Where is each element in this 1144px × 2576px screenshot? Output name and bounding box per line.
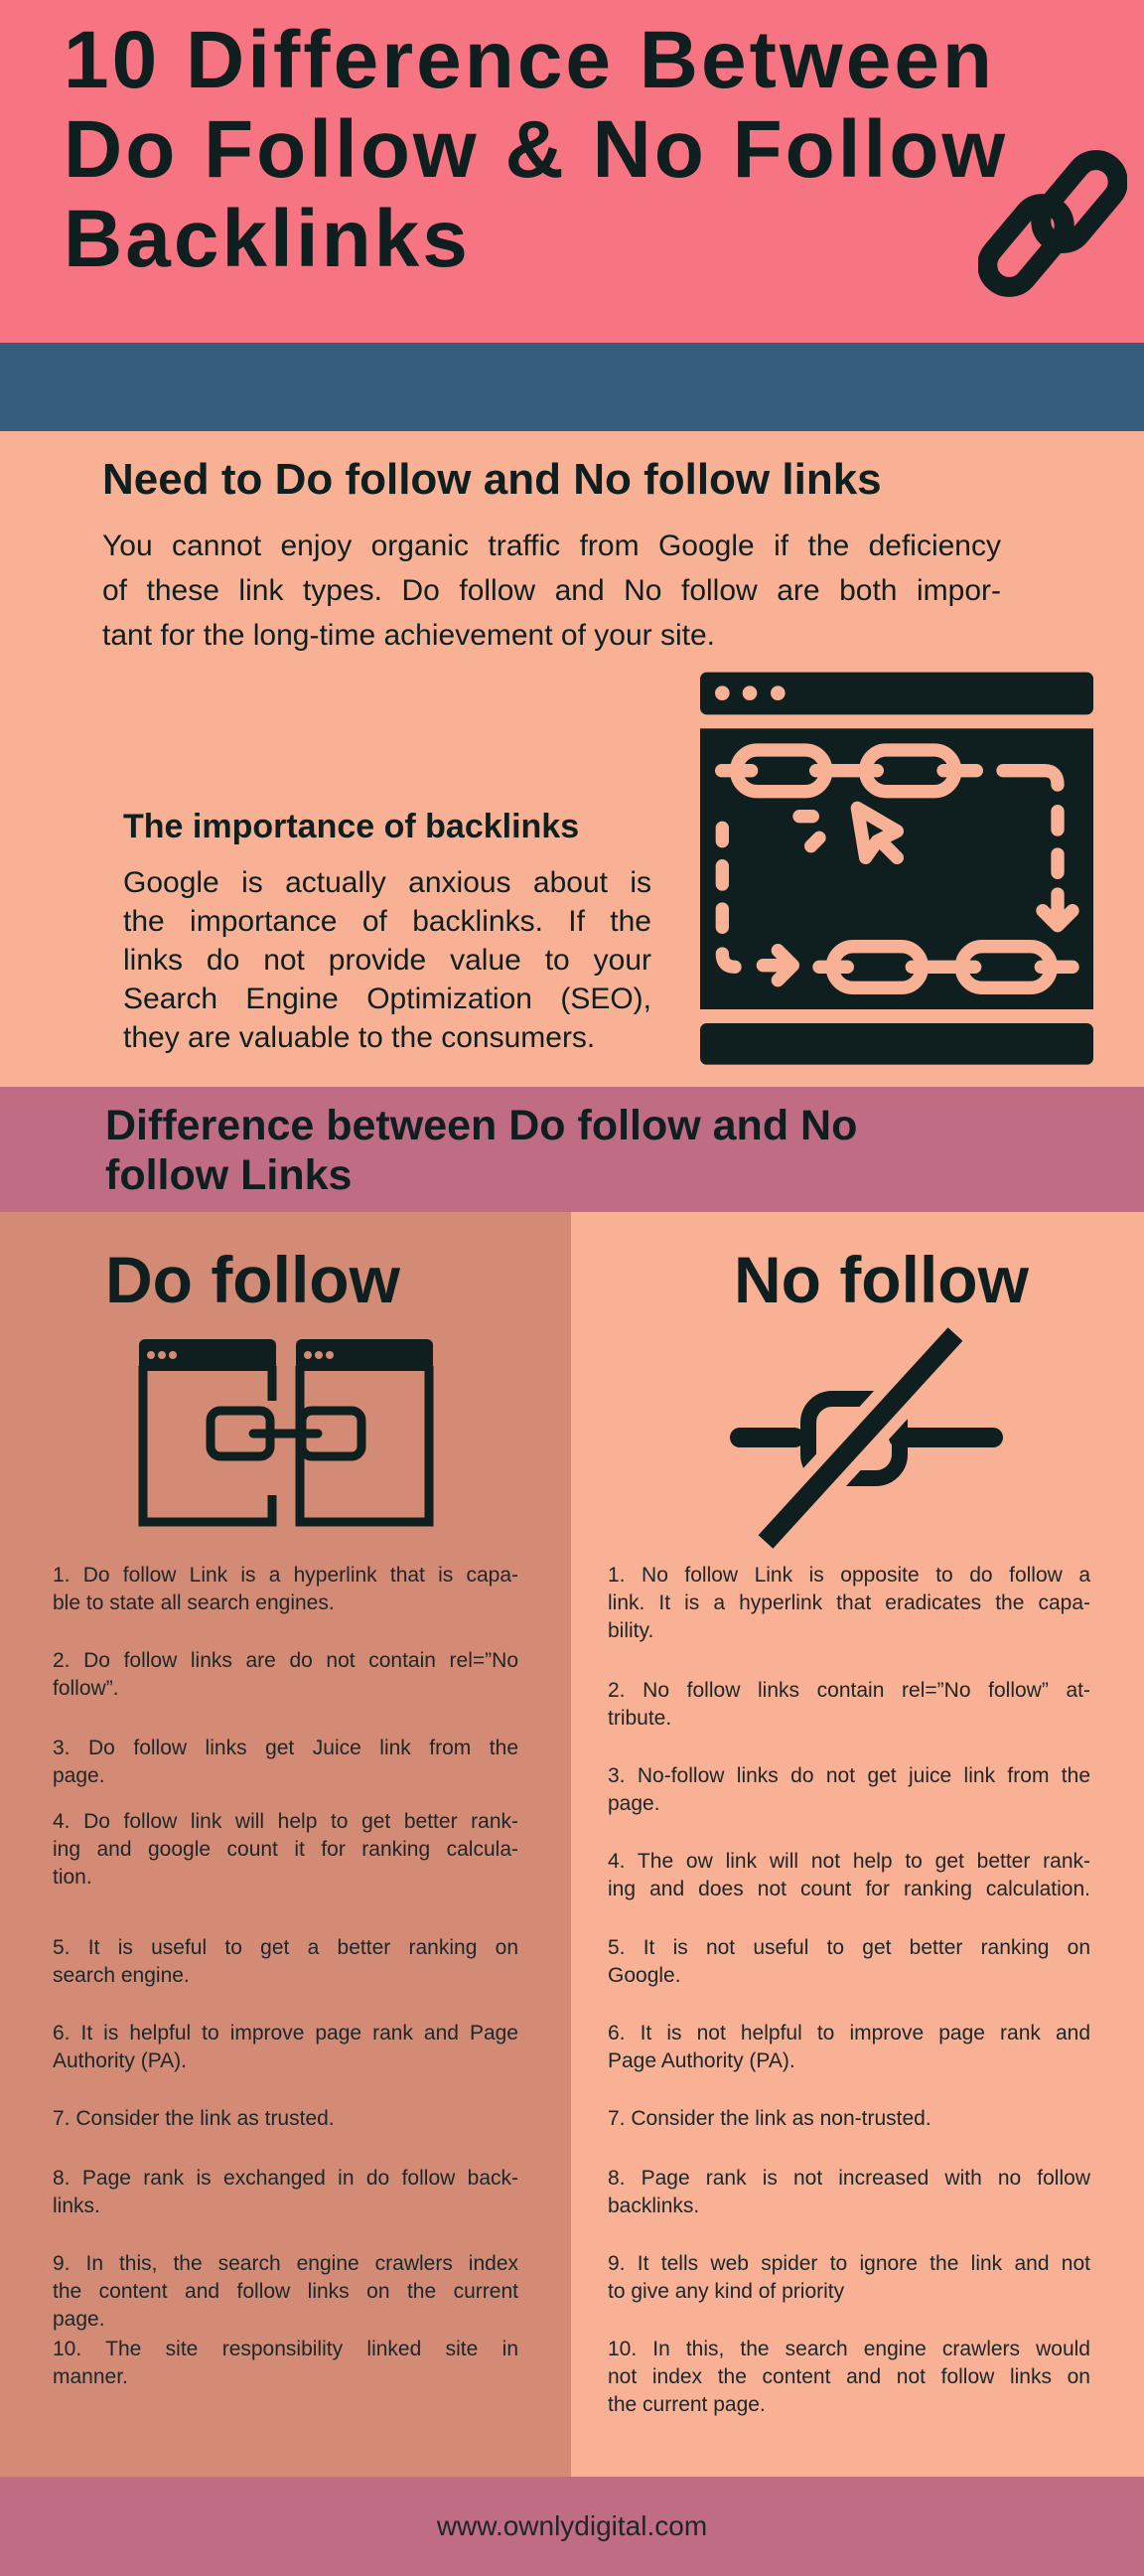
text: importance paragraph bbox=[123, 866, 651, 1054]
list: no follow points: bility. bbox=[608, 1619, 653, 1642]
list: no follow points: 2. No follow links contain rel=”No follow” at- bbox=[608, 1679, 1090, 1702]
list: do follow points: ble to state all search engines. bbox=[53, 1591, 335, 1614]
heading: importance: The importance of backlinks bbox=[123, 808, 579, 845]
heading: difference: Difference between Do follow and No bbox=[105, 1102, 857, 1149]
list: do follow points: 7. Consider the link as trusted. bbox=[53, 2107, 335, 2130]
text: need paragraph bbox=[102, 530, 1001, 652]
header band bbox=[0, 0, 1144, 343]
list: no follow points: not index the content and not follow links on bbox=[608, 2365, 1090, 2388]
text: need paragraph: You cannot enjoy organic traffic from Google if the deficiency bbox=[102, 530, 1001, 562]
text: importance paragraph: Google is actually anxious about is bbox=[123, 866, 651, 899]
list: no follow points: 4. The ow link will not help to get better rank- bbox=[608, 1850, 1090, 1873]
list: no follow points: Page Authority (PA). bbox=[608, 2049, 795, 2072]
text: importance paragraph: they are valuable to the consumers. bbox=[123, 1021, 595, 1054]
list: do follow points bbox=[53, 1564, 518, 2388]
list: do follow points: 5. It is useful to get a better ranking on bbox=[53, 1936, 518, 1959]
list: do follow points: 6. It is helpful to improve page rank and Page bbox=[53, 2022, 518, 2045]
list: no follow points: ing and does not count for ranking calculation. bbox=[608, 1878, 1090, 1900]
text: need paragraph: tant for the long-time achievement of your site. bbox=[102, 619, 715, 652]
list: do follow points: 10. The site responsibility linked site in bbox=[53, 2338, 518, 2360]
heading: need: Need to Do follow and No follow links bbox=[102, 455, 882, 504]
heading: do follow: Do follow bbox=[105, 1243, 400, 1316]
list: no follow points: 5. It is not useful to get better ranking on bbox=[608, 1936, 1090, 1959]
list: do follow points: page. bbox=[53, 1764, 105, 1787]
text: importance paragraph: links do not provide value to your bbox=[123, 944, 651, 977]
list: do follow points: page. bbox=[53, 2308, 105, 2331]
text: importance paragraph: the importance of backlinks. If the bbox=[123, 905, 651, 938]
list: no follow points: 8. Page rank is not increased with no follow bbox=[608, 2167, 1090, 2190]
list: no follow points: 9. It tells web spider to ignore the link and not bbox=[608, 2252, 1090, 2275]
list: do follow points: ing and google count it for ranking calcula- bbox=[53, 1838, 518, 1861]
list: no follow points: 6. It is not helpful to improve page rank and bbox=[608, 2022, 1090, 2045]
text: need paragraph: of these link types. Do follow and No follow are both impor- bbox=[102, 574, 1001, 607]
list: no follow points: link. It is a hyperlink that eradicates the capa- bbox=[608, 1591, 1090, 1614]
list: no follow points bbox=[608, 1564, 1090, 2416]
footer: www.ownlydigital.com bbox=[437, 2510, 707, 2541]
panel: do follow bbox=[0, 1212, 571, 2477]
list: no follow points: tribute. bbox=[608, 1707, 671, 1730]
list: do follow points: 4. Do follow link will help to get better rank- bbox=[53, 1810, 518, 1833]
list: no follow points: 7. Consider the link as non-trusted. bbox=[608, 2107, 931, 2130]
list: do follow points: manner. bbox=[53, 2365, 128, 2388]
list: no follow points: Google. bbox=[608, 1964, 681, 1987]
list: do follow points: the content and follow links on the current bbox=[53, 2280, 518, 2303]
list: do follow points: 2. Do follow links are do not contain rel=”No bbox=[53, 1649, 518, 1672]
list: do follow points: 8. Page rank is exchanged in do follow back- bbox=[53, 2167, 518, 2190]
title: 10 Difference Between bbox=[64, 15, 995, 105]
list: no follow points: page. bbox=[608, 1792, 660, 1815]
heading: difference bbox=[105, 1102, 857, 1199]
panel: no follow bbox=[571, 1212, 1144, 2477]
heading: difference: follow Links bbox=[105, 1151, 352, 1199]
list: no follow points: to give any kind of priority bbox=[608, 2280, 844, 2303]
list: do follow points: links. bbox=[53, 2195, 100, 2217]
title: Backlinks bbox=[64, 194, 471, 284]
list: do follow points: Authority (PA). bbox=[53, 2049, 187, 2072]
icon: chain link bbox=[978, 150, 1127, 297]
list: do follow points: tion. bbox=[53, 1866, 92, 1889]
footer bbox=[0, 2477, 1144, 2576]
title: Do Follow & No Follow bbox=[64, 104, 1008, 195]
list: no follow points: backlinks. bbox=[608, 2195, 699, 2217]
list: no follow points: 1. No follow Link is opposite to do follow a bbox=[608, 1564, 1090, 1587]
icon: two browsers linked bbox=[139, 1339, 433, 1526]
list: do follow points: search engine. bbox=[53, 1964, 190, 1987]
icon: browser with chains bbox=[700, 672, 1093, 1065]
blue band bbox=[0, 343, 1144, 431]
list: no follow points: 10. In this, the search engine crawlers would bbox=[608, 2338, 1090, 2360]
list: no follow points: the current page. bbox=[608, 2393, 766, 2416]
text: importance paragraph: Search Engine Optimization (SEO), bbox=[123, 983, 651, 1015]
list: do follow points: 3. Do follow links get Juice link from the bbox=[53, 1737, 518, 1759]
list: do follow points: follow”. bbox=[53, 1677, 119, 1700]
icon: broken link bbox=[730, 1327, 1003, 1549]
list: do follow points: 9. In this, the search engine crawlers index bbox=[53, 2252, 518, 2275]
list: do follow points: 1. Do follow Link is a hyperlink that is capa- bbox=[53, 1564, 518, 1587]
list: no follow points: 3. No-follow links do not get juice link from the bbox=[608, 1764, 1090, 1787]
band: difference heading bbox=[0, 1087, 1144, 1212]
title bbox=[64, 15, 1008, 284]
heading: no follow: No follow bbox=[734, 1243, 1029, 1316]
